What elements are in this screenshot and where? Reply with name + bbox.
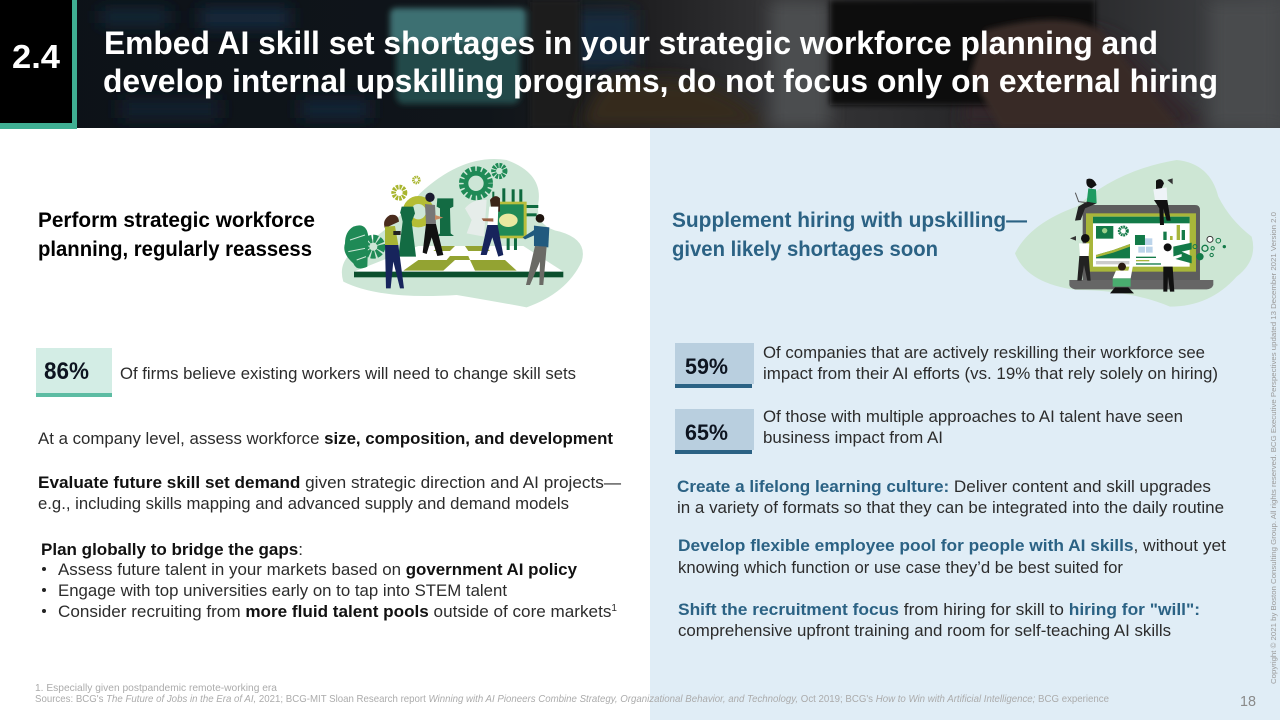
text: plan globally: Consider recruiting from more fluid talent pools outside of core markets [58,602,610,621]
chip [492,192,494,203]
person: woman with tablet [384,215,404,288]
right heading: given likely shortages soon [672,238,938,261]
illustration: chess strategy team [342,159,583,307]
left heading: planning, regularly reassess [38,238,312,261]
title: develop internal upskilling programs, do not focus only on external hiring [103,63,1218,99]
illustration: laptop team [1015,160,1253,307]
right panel background [650,128,1280,720]
person: man in blue sweater [523,214,549,285]
right heading: Supplement hiring with upskilling— [672,209,1027,232]
header photo banner [0,0,1280,128]
section number badge [0,0,77,129]
person: man in grey [423,193,443,256]
text: flexible employee pool: knowing which function or use case they’d be best suited for [678,558,1123,577]
stat: 65%: 65% [685,420,728,445]
text: plan globally: 1 [611,603,617,614]
stat: 59%: Of companies that are actively reskilling their workforce see [763,343,1205,362]
left heading [38,209,315,261]
stat: 59%: 59% [685,354,728,379]
stat: 86%: Of firms believe existing workers will need to change skill sets [120,364,576,383]
brain and gear [365,239,381,255]
text: flexible employee pool: Develop flexible employee pool for people with AI skills , without yet [678,536,1226,555]
person: top right with megaphone [1153,178,1173,225]
title: Embed AI skill set shortages in your strategic workforce planning and [104,25,1158,61]
text: company level: At a company level, assess workforce size, composition, and development [38,429,613,448]
text: lifelong learning: Create a lifelong learning culture: Deliver content and skill upgrades [677,477,1211,496]
text: recruitment focus: comprehensive upfront training and room for self-teaching AI skills [678,621,1171,640]
footnote and sources: 1. Especially given postpandemic remote-working era [35,682,277,694]
person: top left with laptop [1075,179,1097,221]
stat: 65%: Of those with multiple approaches to AI talent have seen [763,407,1183,426]
section number badge: 2.4 [12,38,61,75]
footnote and sources: Sources: BCG's The Future of Jobs in the Era of AI, 2021; BCG-MIT Sloan Research report Winning with AI Pioneers Combine Strategy, Organizational Behavior, and Technology, Oct 2019; BCG's How to Win with Artificial Intelligence; BCG experience [35,693,1109,705]
stat: 86% [36,348,576,397]
stat: 86%: 86% [44,358,89,385]
person: woman in white [481,196,503,257]
text: evaluate future demand: Evaluate future skill set demand given strategic direction and AI projects— [38,473,621,492]
gears [463,171,489,196]
title [103,25,1218,99]
chess pieces [398,207,416,257]
person: left with megaphone [1070,234,1091,281]
text: lifelong learning [677,477,1224,517]
text: plan globally: Engage with top universities early on to tap into STEM talent [58,581,507,600]
person: standing at screen [1163,243,1182,292]
text: plan globally [41,540,617,621]
floor [354,246,563,272]
text: plan globally: Plan globally to bridge the gaps: [41,540,303,559]
left heading: Perform strategic workforce [38,209,315,232]
text: evaluate future demand: e.g., including skills mapping and advanced supply and demand models [38,494,569,513]
footnote and sources [35,682,1109,705]
right heading [672,209,1027,261]
stat: 65%: business impact from AI [763,428,943,447]
person: sitting with laptop [1110,259,1134,293]
page number: 18 [1240,693,1256,710]
text: evaluate future demand [38,473,621,513]
text: lifelong learning: in a variety of formats so that they can be integrated into the daily routine [677,498,1224,517]
stat: 65% [675,407,1183,454]
magnet and icons [1173,243,1192,263]
laptop [1083,205,1200,281]
text: recruitment focus [678,600,1200,640]
text: recruitment focus: Shift the recruitment focus from hiring for skill to hiring for "will": [678,600,1200,619]
stat: 59% [675,343,1218,388]
text: flexible employee pool [678,536,1226,577]
copyright note: Copyright © 2021 by Boston Consulting Group. All rights reserved. BCG Executive Perspectives updated 13 December 2021 Version 2.0 [1269,212,1278,684]
stat: 59%: impact from their AI efforts (vs. 19% that rely solely on hiring) [763,364,1218,383]
text: plan globally: Assess future talent in your markets based on government AI policy [58,560,578,579]
